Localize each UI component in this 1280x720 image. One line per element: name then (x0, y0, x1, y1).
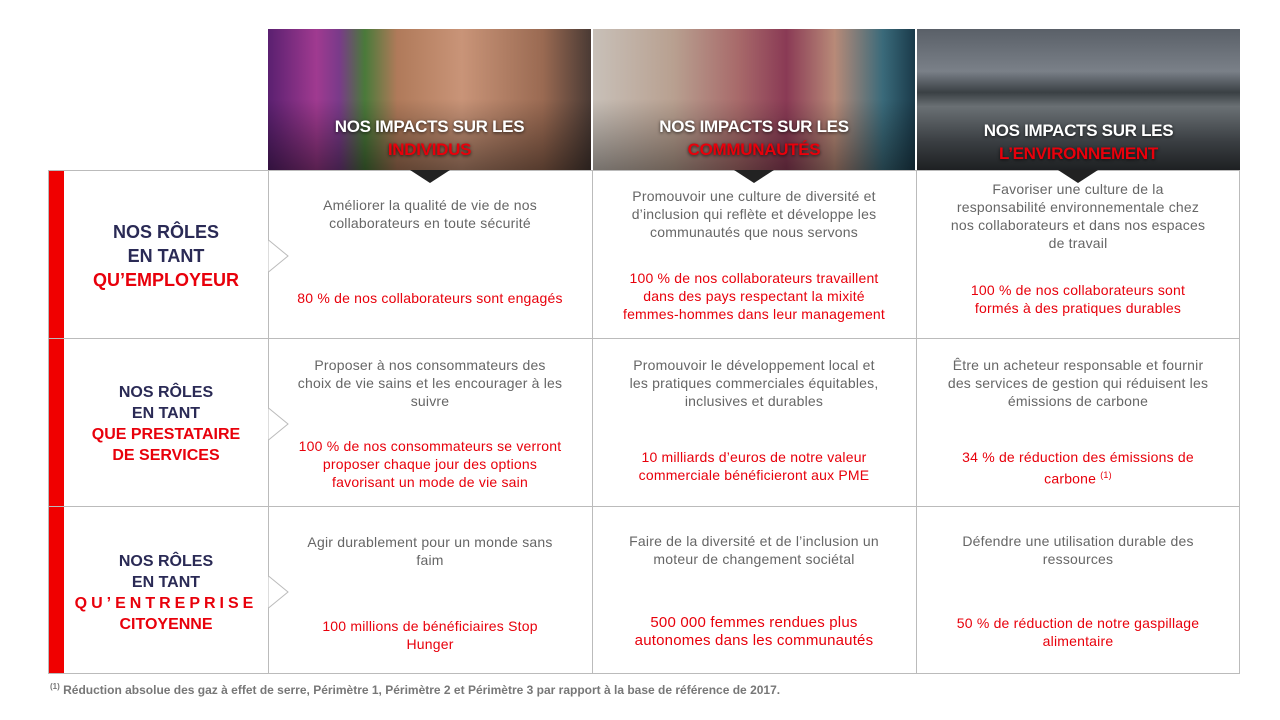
cell r3c1: Hunger (406, 636, 454, 652)
header title: environnement: NOS IMPACTS SUR LES (984, 121, 1173, 140)
cell r3c2: autonomes dans les communautés (635, 632, 873, 649)
header title: environnement: L’ENVIRONNEMENT (999, 144, 1158, 163)
role label: prestataire (92, 382, 240, 464)
cell r1c2: dans des pays respectant la mixité (643, 288, 865, 304)
cell r2c3: 34 % de réduction des émissions de (962, 449, 1194, 465)
cell r3c3: 50 % de réduction de notre gaspillage (957, 615, 1199, 631)
header title: communautés: COMMUNAUTÉS (688, 140, 820, 159)
cell r1c3: Favoriser une culture de la (992, 181, 1164, 197)
cell r1c3: responsabilité environnementale chez (957, 199, 1199, 215)
role label: prestataire: DE SERVICES (112, 447, 220, 464)
cell r1c2: 100 % de nos collaborateurs travaillent (629, 270, 879, 286)
role label: employeur: QU’EMPLOYEUR (93, 270, 239, 290)
cell r1c3: 100 % de nos collaborateurs sont (971, 282, 1185, 298)
cell r2c1: choix de vie sains et les encourager à les (298, 375, 562, 391)
cell r2c1 (298, 357, 562, 490)
cell r1c2: communautés que nous servons (650, 224, 858, 240)
role label: prestataire: NOS RÔLES (119, 384, 213, 401)
cell r3c1: Agir durablement pour un monde sans (307, 534, 553, 550)
cell r2c3: Être un acheteur responsable et fournir (953, 357, 1203, 373)
header title: environnement (983, 121, 1174, 163)
header title: individus (334, 117, 526, 159)
cell r2c1: proposer chaque jour des options (323, 456, 537, 472)
cell r2c2 (630, 357, 878, 483)
cell r1c3: de travail (1049, 235, 1107, 251)
cell r3c3: Défendre une utilisation durable des (962, 533, 1194, 549)
cell r3c3: ressources (1043, 551, 1113, 567)
role label: entreprise citoyenne: QU’ENTREPRISE (75, 595, 257, 612)
cell r2c3: émissions de carbone (1008, 393, 1148, 409)
role label: employeur: NOS RÔLES (113, 222, 219, 242)
cell r1c3 (951, 181, 1205, 316)
cell r3c2 (629, 533, 879, 649)
cell r1c3: formés à des pratiques durables (975, 300, 1181, 316)
cell r2c3: des services de gestion qui réduisent les (948, 375, 1208, 391)
cell r3c2: 500 000 femmes rendues plus (650, 614, 858, 631)
cell r3c3: alimentaire (1043, 633, 1113, 649)
arrow: header pointer communautés (734, 170, 774, 183)
arrow: header pointer individus (410, 170, 450, 183)
header title: communautés (658, 117, 850, 159)
cell r2c3 (948, 357, 1208, 487)
cell r2c2: Promouvoir le développement local et (633, 357, 875, 373)
cell r1c3: nos collaborateurs et dans nos espaces (951, 217, 1205, 233)
cell r1c2: femmes-hommes dans leur management (623, 306, 885, 322)
cell r1c2: Promouvoir une culture de diversité et (632, 188, 876, 204)
cell r2c1: favorisant un mode de vie sain (332, 474, 528, 490)
cell r3c3 (957, 533, 1199, 649)
cell r2c2: inclusives et durables (685, 393, 823, 409)
header title: individus: NOS IMPACTS SUR LES (335, 117, 524, 136)
arrow: header pointer environnement (1058, 170, 1098, 183)
cell r2c2: commerciale bénéficieront aux PME (639, 467, 869, 483)
role label: prestataire: EN TANT (132, 405, 200, 422)
cell r2c1: 100 % de nos consommateurs se verront (299, 438, 561, 454)
role label: employeur: EN TANT (128, 246, 204, 266)
cell r1c2 (623, 188, 885, 322)
role label: prestataire: QUE PRESTATAIRE (92, 426, 240, 443)
cell r2c1: suivre (411, 393, 449, 409)
cell r2c3: carbone (1) (1044, 470, 1112, 487)
role label: employeur (93, 221, 239, 290)
cell r1c1: Améliorer la qualité de vie de nos (323, 197, 537, 213)
cell r3c1: faim (416, 552, 444, 568)
cell r3c1 (307, 534, 553, 652)
cell r2c2: 10 milliards d’euros de notre valeur (641, 449, 867, 465)
role label: entreprise citoyenne (75, 552, 257, 633)
cell r2c1: Proposer à nos consommateurs des (314, 357, 546, 373)
header title: individus: INDIVIDUS (388, 140, 471, 159)
header image: communautés (593, 29, 915, 170)
role label: entreprise citoyenne: CITOYENNE (119, 616, 213, 633)
role label: entreprise citoyenne: NOS RÔLES (119, 553, 213, 570)
cell r3c2: Faire de la diversité et de l’inclusion un (629, 533, 879, 549)
header title: communautés: NOS IMPACTS SUR LES (659, 117, 849, 136)
cell r2c2: les pratiques commerciales équitables, (630, 375, 878, 391)
cell r1c1: 80 % de nos collaborateurs sont engagés (297, 290, 563, 306)
header image: environnement (917, 29, 1240, 170)
cell r3c1: 100 millions de bénéficiaires Stop (322, 618, 538, 634)
footnote: (1) Réduction absolue des gaz à effet de serre, Périmètre 1, Périmètre 2 et Périmètre 3 par rapport à la base de référence de 2017. (50, 682, 780, 697)
cell r3c2: moteur de changement sociétal (653, 551, 855, 567)
header image: individus (268, 29, 591, 170)
role label: entreprise citoyenne: EN TANT (132, 574, 200, 591)
cell r1c1: collaborateurs en toute sécurité (329, 215, 531, 231)
cell r1c1 (297, 197, 563, 306)
cell r1c2: d’inclusion qui reflète et développe les (632, 206, 876, 222)
